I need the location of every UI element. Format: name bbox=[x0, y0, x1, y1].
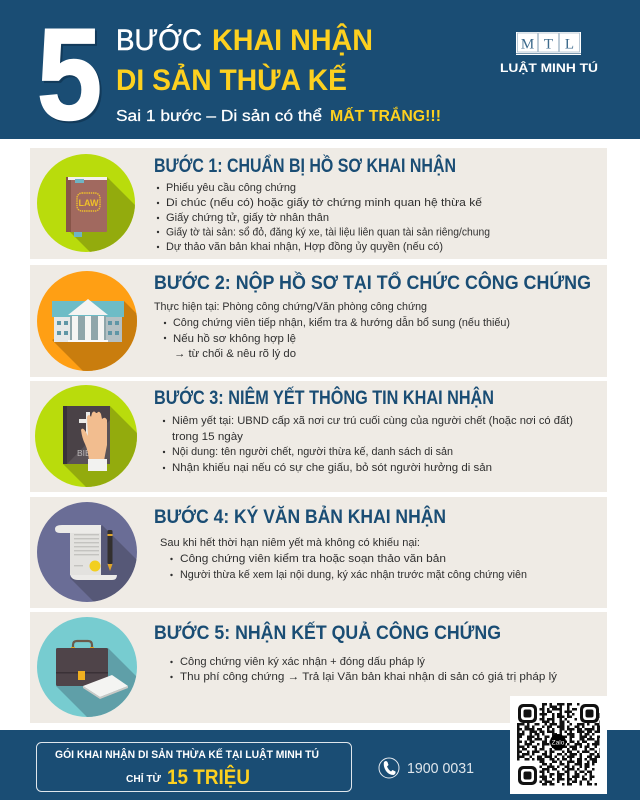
step 2 list: → từ chối & nêu rõ lý do bbox=[174, 348, 296, 360]
step 3 list bbox=[163, 415, 573, 474]
heading step 3: BƯỚC 3: NIÊM YẾT THÔNG TIN KHAI NHẬN bbox=[154, 387, 494, 409]
panel: step 3 bbox=[30, 381, 607, 492]
logo MTL: L bbox=[565, 36, 574, 52]
title line 1: BƯỚC bbox=[116, 24, 202, 57]
step 5 list: Công chứng viên ký xác nhận + đóng dấu pháp lý bbox=[180, 656, 426, 668]
phone contact: 1900 0031 bbox=[407, 760, 474, 777]
price callout: GÓI KHAI NHẬN DI SẢN THỪA KẾ TẠI LUẬT MINH TÚ bbox=[55, 748, 319, 761]
panel: step 5 bbox=[30, 612, 607, 723]
title line 1: KHAI NHẬN bbox=[212, 23, 373, 57]
step 2 list: Thực hiện tại: Phòng công chứng/Văn phòng công chứng bbox=[154, 301, 427, 313]
subtitle: MẤT TRẮNG!!! bbox=[330, 107, 441, 125]
step 3 list: Nội dung: tên người chết, người thừa kế, danh sách di sản bbox=[172, 446, 453, 458]
footer band bbox=[0, 730, 640, 800]
step 3 list: Nhận khiếu nại nếu có sự che giấu, bỏ sót người hưởng di sản bbox=[172, 462, 492, 474]
panel: step 4 bbox=[30, 497, 607, 608]
logo MTL: LUẬT MINH TÚ bbox=[500, 60, 598, 75]
big number 5: 5 bbox=[39, 3, 104, 149]
price callout: CHỈ TỪ bbox=[126, 772, 161, 785]
icon: law book bbox=[37, 154, 135, 252]
step 3 list: Niêm yết tại: UBND cấp xã nơi cư trú cuối cùng của người chết (hoặc nơi có đất) bbox=[172, 415, 573, 427]
step 5 list bbox=[170, 656, 558, 683]
panel: step 2 bbox=[30, 265, 607, 377]
QR code bbox=[510, 696, 607, 794]
heading step 1: BƯỚC 1: CHUẨN BỊ HỒ SƠ KHAI NHẬN bbox=[154, 155, 456, 177]
QR code: Zalo bbox=[552, 740, 565, 746]
step 4 list: Người thừa kế xem lại nội dung, ký xác nhận trước mặt công chứng viên bbox=[180, 569, 527, 581]
step 2 list bbox=[154, 301, 510, 360]
icon: hand on bible: BIB bbox=[77, 448, 91, 458]
heading step 5: BƯỚC 5: NHẬN KẾT QUẢ CÔNG CHỨNG bbox=[154, 622, 501, 644]
icon: document scroll and pen bbox=[37, 502, 137, 602]
step 1 list bbox=[157, 182, 490, 253]
panel: step 1 bbox=[30, 148, 607, 270]
step 1 list: Phiếu yêu cầu công chứng bbox=[166, 182, 296, 194]
heading step 2: BƯỚC 2: NỘP HỒ SƠ TẠI TỔ CHỨC CÔNG CHỨNG bbox=[154, 272, 591, 294]
logo MTL: M bbox=[521, 36, 534, 52]
step 4 list bbox=[160, 537, 527, 581]
subtitle bbox=[116, 107, 441, 125]
step 1 list: Di chúc (nếu có) hoặc giấy tờ chứng minh quan hệ thừa kế bbox=[166, 197, 482, 209]
header banner bbox=[0, 0, 640, 149]
logo MTL bbox=[500, 32, 598, 75]
step 5 list: Thu phí công chứng → Trả lại Văn bản khai nhận di sản có giá trị pháp lý bbox=[180, 671, 558, 683]
subtitle: Sai 1 bước – Di sản có thể bbox=[116, 108, 322, 125]
step 2 list: Nếu hồ sơ không hợp lệ bbox=[173, 333, 296, 345]
step 1 list: Giấy tờ tài sản: sổ đỏ, đăng ký xe, tài liệu liên quan tài sản riêng/chung bbox=[166, 226, 490, 238]
icon: notary building bbox=[37, 271, 137, 371]
title line 2: DI SẢN THỪA KẾ bbox=[116, 63, 347, 97]
icon: briefcase and papers bbox=[37, 617, 137, 717]
step 1 list: Giấy chứng tử, giấy tờ nhân thân bbox=[166, 212, 329, 224]
step 3 list: trong 15 ngày bbox=[172, 431, 244, 443]
icon: law book: LAW bbox=[78, 198, 99, 208]
big number 5: 5 bbox=[37, 1, 102, 147]
logo MTL: T bbox=[544, 36, 553, 52]
price callout: 15 TRIỆU bbox=[167, 765, 250, 789]
step 2 list: Công chứng viên tiếp nhận, kiểm tra & hướng dẫn bổ sung (nếu thiếu) bbox=[173, 316, 510, 329]
price callout bbox=[36, 742, 352, 792]
heading step 4: BƯỚC 4: KÝ VĂN BẢN KHAI NHẬN bbox=[154, 506, 446, 528]
title line 1 bbox=[116, 23, 373, 57]
step 1 list: Dự thảo văn bản khai nhận, Hợp đồng ủy quyền (nếu có) bbox=[166, 241, 443, 253]
icon: hand on bible bbox=[35, 385, 137, 487]
step 4 list: Sau khi hết thời hạn niêm yết mà không có khiếu nại: bbox=[160, 537, 420, 549]
phone contact bbox=[379, 758, 474, 778]
step 4 list: Công chứng viên kiểm tra hoặc soạn thảo văn bản bbox=[180, 553, 446, 565]
